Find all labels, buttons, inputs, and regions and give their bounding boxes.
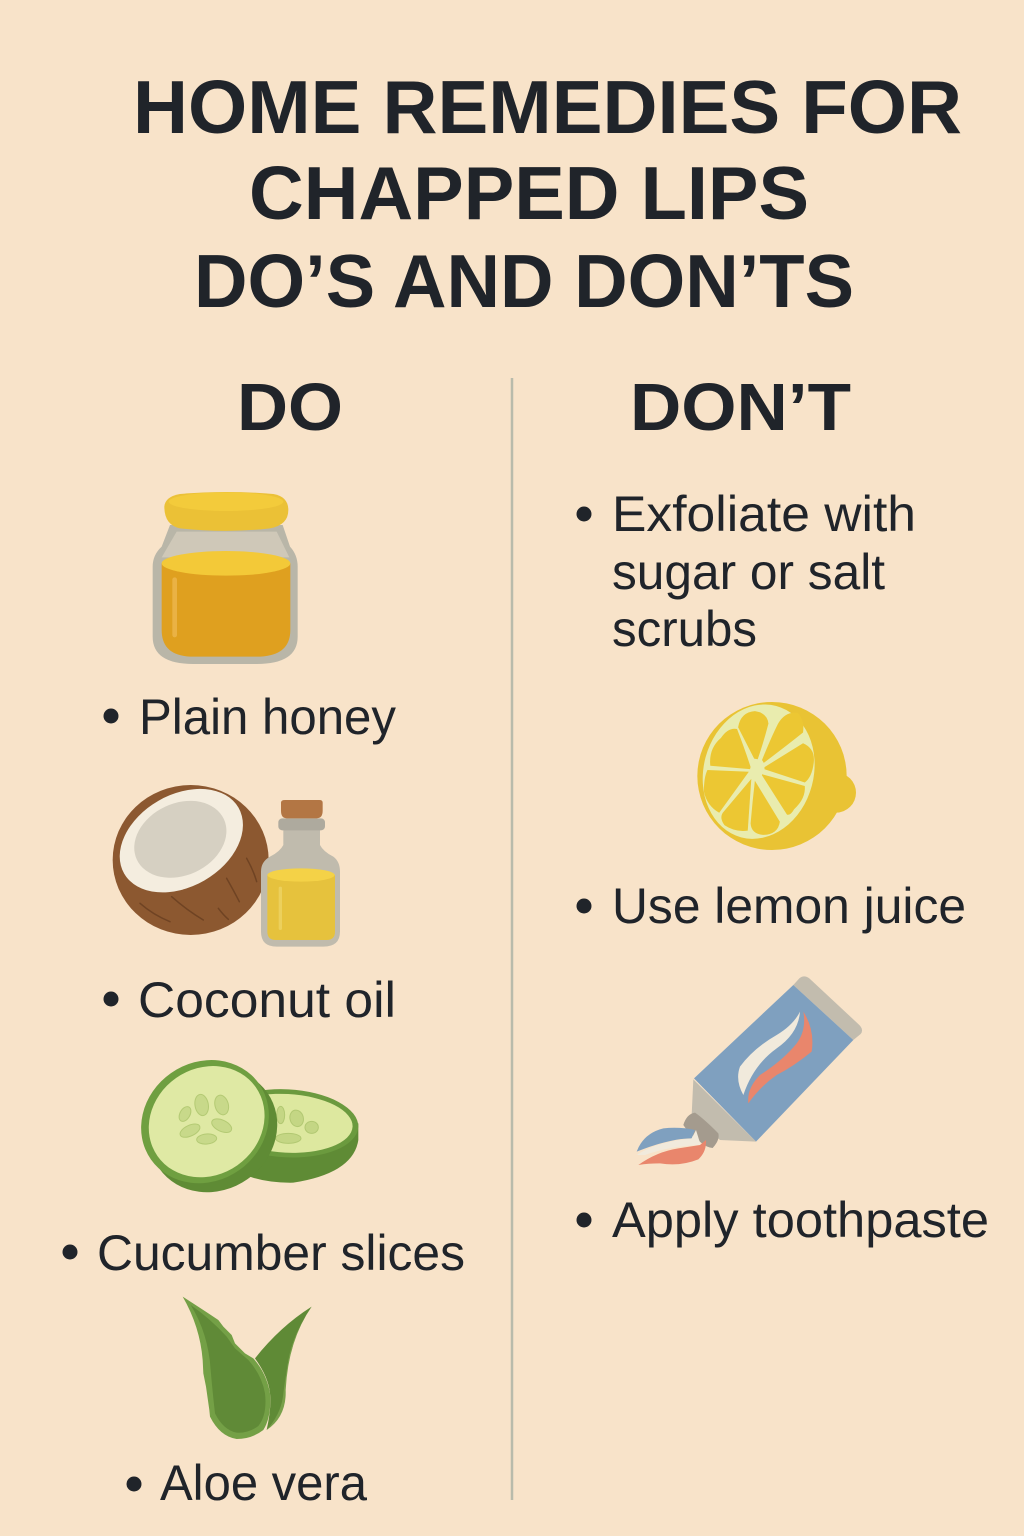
icon: aloe vera — [183, 1297, 312, 1439]
panel: don't — [576, 370, 989, 1248]
icon: honey jar — [153, 492, 298, 664]
item: exfoliate with sugar or salt scrubs: sugar or salt — [612, 544, 885, 600]
item: exfoliate with sugar or salt scrubs — [576, 486, 916, 657]
item: coconut oil: Coconut oil — [138, 972, 396, 1028]
item: apply toothpaste: Apply toothpaste — [612, 1192, 989, 1248]
icon: toothpaste tube — [637, 976, 862, 1165]
item: aloe vera: Aloe vera — [160, 1455, 367, 1511]
icon: lemon half — [688, 692, 856, 852]
title: DO’S AND DON’TS — [194, 239, 854, 323]
icon: coconut and oil bottle — [101, 768, 340, 947]
title: HOME REMEDIES FOR — [133, 65, 962, 149]
item: exfoliate with sugar or salt scrubs: Exfoliate with — [612, 486, 916, 542]
title — [133, 65, 962, 323]
icon: cucumber slices — [117, 1035, 360, 1217]
item: plain honey: Plain honey — [139, 689, 396, 745]
item: exfoliate with sugar or salt scrubs: scrubs — [612, 601, 757, 657]
heading: do: DO — [237, 370, 343, 445]
title: CHAPPED LIPS — [249, 151, 809, 235]
item: use lemon juice: Use lemon juice — [612, 878, 966, 934]
panel: do — [62, 370, 465, 1511]
item: cucumber slices: Cucumber slices — [97, 1225, 465, 1281]
heading: don't: DON’T — [630, 370, 851, 445]
